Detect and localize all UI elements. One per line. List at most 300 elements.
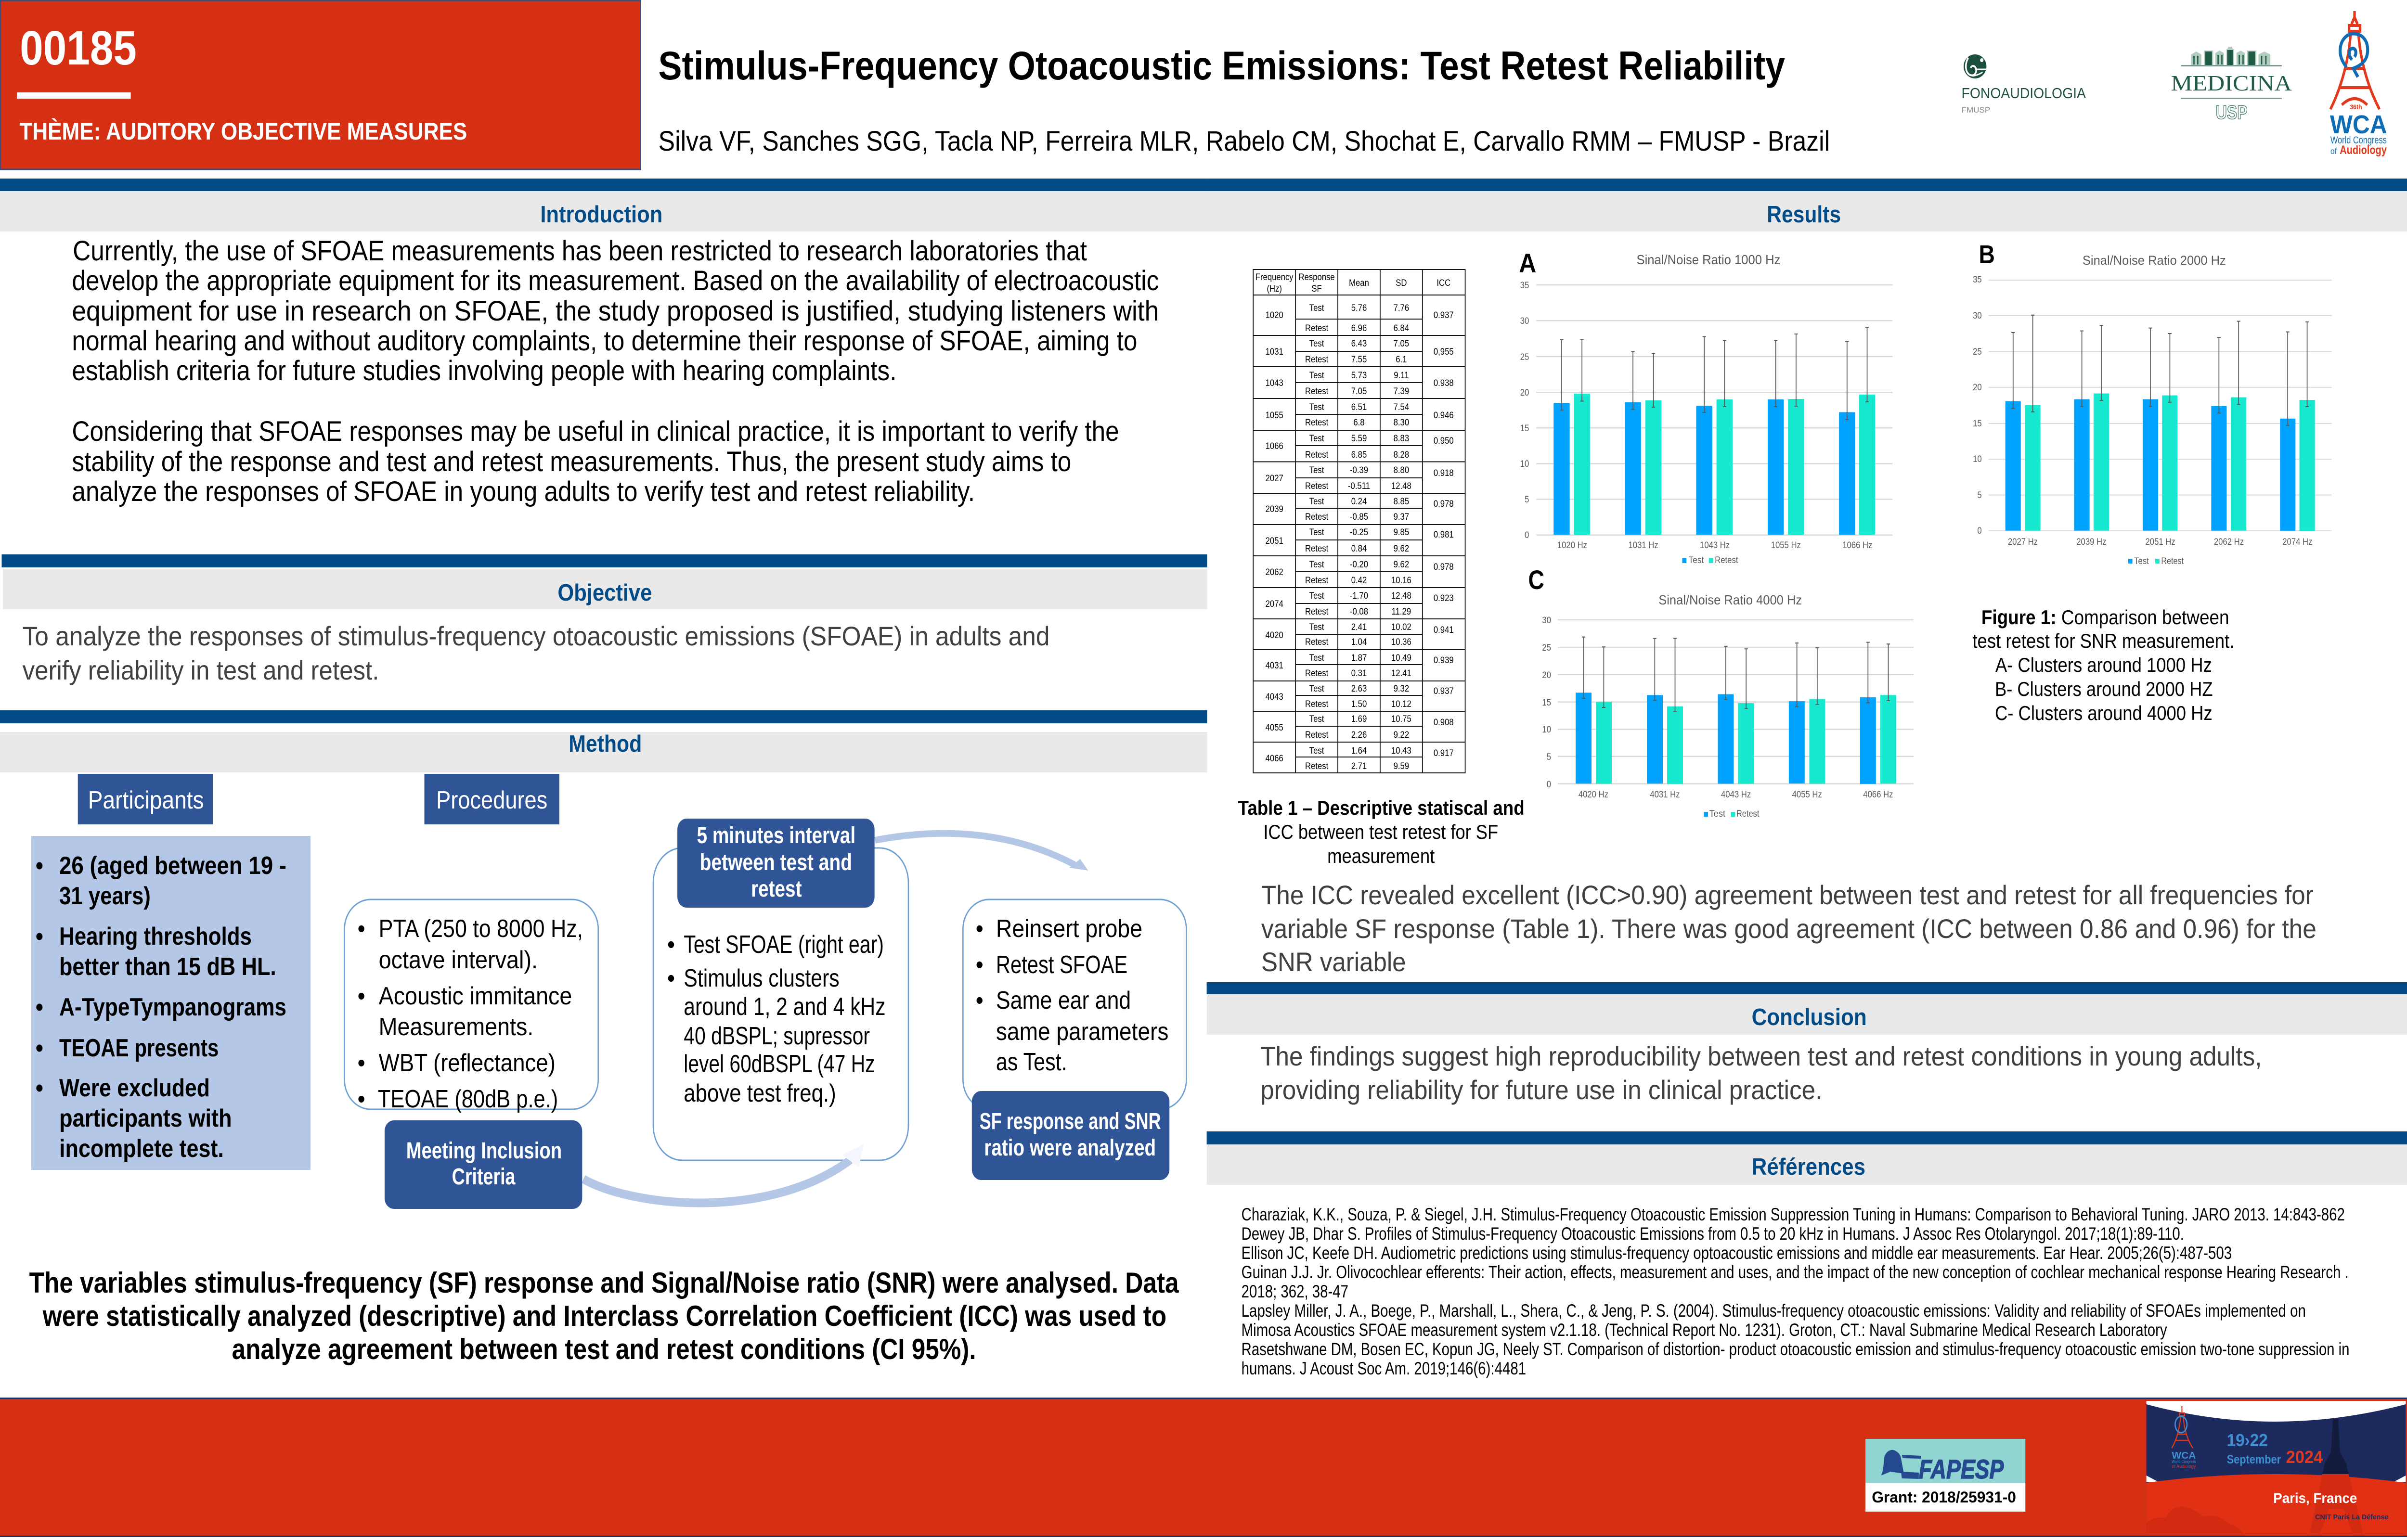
text block: ICC results: SNR variable xyxy=(1261,947,1406,977)
text block: reference list: 2018; 362, 38-47 xyxy=(1242,1282,1348,1301)
table: descriptive statistics and ICC: Test xyxy=(1309,303,1324,313)
chart B: Sinal/Noise Ratio 2000 Hz: Test xyxy=(2134,556,2149,566)
table: descriptive statistics and ICC: 7.54 xyxy=(1394,402,1409,412)
table: descriptive statistics and ICC: 8.83 xyxy=(1394,433,1409,443)
table: descriptive statistics and ICC: Retest xyxy=(1305,699,1328,709)
callout: SF response and SNR xyxy=(972,1091,1169,1180)
table: descriptive statistics and ICC: 6.8 xyxy=(1353,417,1365,427)
chart C: Sinal/Noise Ratio 4000 Hz: 0 xyxy=(1547,779,1551,789)
table: descriptive statistics and ICC: 1020 xyxy=(1266,310,1283,320)
panel: retest list: Retest SFOAE xyxy=(996,951,1127,979)
figure caption: C- Clusters around 4000 Hz xyxy=(1995,702,2213,725)
table: descriptive statistics and ICC: Retest xyxy=(1305,637,1328,647)
chart C: Sinal/Noise Ratio 4000 Hz: 10 xyxy=(1542,724,1551,734)
table: descriptive statistics and ICC: 1.50 xyxy=(1351,699,1367,709)
table: descriptive statistics and ICC: Test xyxy=(1309,433,1324,443)
table: descriptive statistics and ICC: -0.08 xyxy=(1350,606,1368,616)
table: descriptive statistics and ICC: 6.51 xyxy=(1351,402,1367,412)
table: descriptive statistics and ICC: 0.937 xyxy=(1434,686,1454,696)
table: descriptive statistics and ICC: 2027 xyxy=(1266,473,1283,483)
table: descriptive statistics and ICC: 10.75 xyxy=(1391,714,1411,724)
text block: introduction paragraphs xyxy=(72,235,1159,507)
table: descriptive statistics and ICC: Test xyxy=(1309,338,1324,348)
panel: retest list: • xyxy=(976,951,984,979)
theme label: THÈME: AUDITORY OBJECTIVE MEASURES xyxy=(19,117,467,145)
table: descriptive statistics and ICC: 9.62 xyxy=(1394,543,1409,553)
table: descriptive statistics and ICC: 1.87 xyxy=(1351,653,1367,663)
table caption: Table 1 – Descriptive statiscal and xyxy=(1238,797,1525,820)
table caption: measurement xyxy=(1327,845,1435,868)
table: descriptive statistics and ICC: 2.63 xyxy=(1351,683,1367,693)
chart C: Sinal/Noise Ratio 4000 Hz: 20 xyxy=(1542,670,1551,680)
table: descriptive statistics and ICC: 10.12 xyxy=(1391,699,1411,709)
table: descriptive statistics and ICC: 0.42 xyxy=(1351,575,1367,585)
chart C: Sinal/Noise Ratio 4000 Hz: Sinal/Noise Ratio 4000 Hz xyxy=(1658,592,1802,607)
text block: introduction paragraphs: equipment for use in research on SFOAE, the study proposed is justified, studying listeners with xyxy=(72,295,1159,327)
panel: SFOAE test list: above test freq.) xyxy=(684,1079,836,1107)
chart A: Sinal/Noise Ratio 1000 Hz: Sinal/Noise Ratio 1000 Hz xyxy=(1637,252,1780,267)
table: descriptive statistics and ICC: 0.24 xyxy=(1351,496,1367,506)
chart B: Sinal/Noise Ratio 2000 Hz: 2051 Hz xyxy=(2146,537,2175,547)
panel: participants criteria: incomplete test. xyxy=(59,1135,224,1163)
logo: WCA World Congress of Audiology: World Congress xyxy=(2330,135,2387,146)
table: descriptive statistics and ICC: 2051 xyxy=(1266,536,1283,546)
chart A: Sinal/Noise Ratio 1000 Hz: 1066 Hz xyxy=(1842,540,1872,550)
chart B: Sinal/Noise Ratio 2000 Hz: 2062 Hz xyxy=(2214,537,2244,547)
chart A: Sinal/Noise Ratio 1000 Hz: A xyxy=(1519,248,1536,279)
table: descriptive statistics and ICC: 6.1 xyxy=(1396,354,1407,364)
text block: reference list: Ellison JC, Keefe DH. Audiometric predictions using stimulus-frequency optoacoustic emissions and middle ear measurements. Ear Hear. 2005;26(5):487-503 xyxy=(1242,1243,2232,1263)
chart C: Sinal/Noise Ratio 4000 Hz: 4020 Hz xyxy=(1579,789,1608,799)
table: descriptive statistics and ICC: 7.55 xyxy=(1351,354,1367,364)
heading: Results: Results xyxy=(1767,201,1841,228)
text block: reference list: humans. J Acoust Soc Am. 2019;146(6):4481 xyxy=(1242,1359,1526,1378)
table caption: ICC between test retest for SF xyxy=(1263,821,1498,844)
table: descriptive statistics and ICC: 0.950 xyxy=(1434,436,1454,446)
chart B: Sinal/Noise Ratio 2000 Hz: Retest xyxy=(2161,556,2184,566)
heading: Objective: Objective xyxy=(557,579,652,606)
table: descriptive statistics and ICC: Test xyxy=(1309,590,1324,601)
panel: procedures list: PTA (250 to 8000 Hz, xyxy=(379,915,583,943)
table: descriptive statistics and ICC: SD xyxy=(1396,278,1407,288)
table: descriptive statistics and ICC: 5.76 xyxy=(1351,303,1367,313)
table: descriptive statistics and ICC: 11.29 xyxy=(1392,606,1411,616)
chart C: Sinal/Noise Ratio 4000 Hz: C xyxy=(1528,565,1544,595)
table: descriptive statistics and ICC: 0.939 xyxy=(1434,655,1454,665)
table: descriptive statistics and ICC: 0.946 xyxy=(1434,410,1454,420)
panel: participants criteria: • xyxy=(36,993,43,1021)
chart A: Sinal/Noise Ratio 1000 Hz: 1043 Hz xyxy=(1700,540,1730,550)
table: descriptive statistics and ICC: -0.39 xyxy=(1350,465,1368,475)
logo: Fonoaudiologia FMUSP: FONOAUDIOLOGIA xyxy=(1962,85,2086,102)
chart C: Sinal/Noise Ratio 4000 Hz: 4043 Hz xyxy=(1721,789,1751,799)
table: descriptive statistics and ICC: Mean xyxy=(1349,278,1369,288)
table: descriptive statistics and ICC: 1.04 xyxy=(1351,637,1367,647)
panel: SFOAE test list: • xyxy=(667,964,675,992)
table: descriptive statistics and ICC: 1.69 xyxy=(1351,714,1367,724)
table: descriptive statistics and ICC: 6.43 xyxy=(1351,338,1367,348)
table: descriptive statistics and ICC: 7.05 xyxy=(1351,386,1367,396)
panel: references xyxy=(1207,1131,2407,1378)
text block: conclusion: The findings suggest high reproducibility between test and retest conditions in young adults, xyxy=(1260,1041,2262,1072)
table: descriptive statistics and ICC: 8.80 xyxy=(1394,465,1409,475)
text block: introduction paragraphs: normal hearing and without auditory complaints, to determine their response of SFOAE, aiming to xyxy=(72,325,1137,357)
callout: meeting inclusion criteria: Criteria xyxy=(452,1163,516,1190)
table: descriptive statistics and ICC: 1066 xyxy=(1266,441,1283,451)
table: descriptive statistics and ICC: 0.938 xyxy=(1434,378,1454,388)
logo: FAPESP grant: FAPESP xyxy=(1919,1454,2004,1485)
panel: participants criteria: • xyxy=(36,923,43,950)
logo: Medicina USP: USP xyxy=(2216,102,2248,123)
panel: participants criteria: better than 15 dB HL. xyxy=(59,953,276,981)
table: descriptive statistics and ICC: Retest xyxy=(1305,668,1328,678)
text block: objective: To analyze the responses of stimulus-frequency otoacoustic emissions (SFOAE) in adults and xyxy=(23,621,1050,652)
text block: objective: verify reliability in test and retest. xyxy=(23,655,379,686)
table: descriptive statistics and ICC: Retest xyxy=(1305,386,1328,396)
chart C: Sinal/Noise Ratio 4000 Hz: Retest xyxy=(1736,808,1759,819)
panel: procedures list: WBT (reflectance) xyxy=(379,1049,556,1077)
table: descriptive statistics and ICC: ICC xyxy=(1436,278,1450,288)
table: descriptive statistics and ICC: Test xyxy=(1309,622,1324,632)
table: descriptive statistics and ICC: -0.20 xyxy=(1350,559,1368,569)
text block: reference list: Lapsley Miller, J. A., Boege, P., Marshall, L., Shera, C., & Jeng, P. S. (2004). Stimulus-frequency otoacoustic emissions: Validity and reliability of SFOAEs implemented on xyxy=(1242,1301,2306,1321)
table: descriptive statistics and ICC: 12.48 xyxy=(1391,590,1411,601)
chart C: Sinal/Noise Ratio 4000 Hz: 25 xyxy=(1542,642,1551,653)
figure caption: B- Clusters around 2000 HZ xyxy=(1995,678,2213,701)
table: descriptive statistics and ICC: Test xyxy=(1309,402,1324,412)
table: descriptive statistics and ICC: 7.76 xyxy=(1394,303,1409,313)
table: descriptive statistics and ICC: Test xyxy=(1309,527,1324,537)
table: descriptive statistics and ICC: 1055 xyxy=(1266,410,1283,420)
logo: Medicina USP: MEDICINA xyxy=(2171,71,2292,96)
table: descriptive statistics and ICC: Retest xyxy=(1305,354,1328,364)
mini WCA tower logo: of Audiology xyxy=(2172,1464,2196,1469)
panel: procedures list: Acoustic immitance xyxy=(379,982,572,1010)
chart C: Sinal/Noise Ratio 4000 Hz: 4031 Hz xyxy=(1650,789,1680,799)
panel: participants criteria: Hearing thresholds xyxy=(59,923,252,950)
chart A: Sinal/Noise Ratio 1000 Hz: 15 xyxy=(1520,423,1529,433)
text block: ICC results: The ICC revealed excellent (ICC>0.90) agreement between test and retest for all frequencies for xyxy=(1261,880,2314,911)
figure caption: A- Clusters around 1000 Hz xyxy=(1995,654,2212,677)
table: descriptive statistics and ICC: 0.978 xyxy=(1434,499,1454,509)
table: descriptive statistics and ICC: Retest xyxy=(1305,417,1328,427)
panel: procedures list: • xyxy=(358,982,365,1010)
table: descriptive statistics and ICC: 9.22 xyxy=(1394,730,1409,740)
panel: SFOAE test list: Test SFOAE (right ear) xyxy=(684,931,884,959)
chart A: Sinal/Noise Ratio 1000 Hz: 25 xyxy=(1520,352,1529,362)
panel: procedures list: • xyxy=(358,1085,365,1113)
panel: SFOAE test list: • xyxy=(667,931,675,959)
table: descriptive statistics and ICC: Retest xyxy=(1305,481,1328,491)
text block: introduction paragraphs: Currently, the use of SFOAE measurements has been restricted to research laboratories that xyxy=(73,235,1087,267)
chart B: Sinal/Noise Ratio 2000 Hz: 5 xyxy=(1977,490,1982,500)
chart B: Sinal/Noise Ratio 2000 Hz: 30 xyxy=(1973,310,1982,321)
table: descriptive statistics and ICC: 10.36 xyxy=(1391,637,1411,647)
panel: participants criteria xyxy=(31,836,311,1170)
table: descriptive statistics and ICC: Test xyxy=(1309,559,1324,569)
label: Participants xyxy=(78,774,213,824)
callout: 5 minutes interval xyxy=(677,819,875,908)
table: descriptive statistics and ICC: 0.917 xyxy=(1434,748,1454,758)
table: descriptive statistics and ICC: 0.937 xyxy=(1434,310,1454,320)
chart C: Sinal/Noise Ratio 4000 Hz: 15 xyxy=(1542,697,1551,707)
table: descriptive statistics and ICC: Test xyxy=(1309,683,1324,693)
panel: SFOAE test list: Stimulus clusters xyxy=(684,964,840,992)
panel: participants criteria: Were excluded xyxy=(59,1074,210,1102)
panel: SFOAE test list: level 60dBSPL (47 Hz xyxy=(684,1050,875,1078)
callout: meeting inclusion criteria: Meeting Inclusion xyxy=(406,1137,562,1164)
chart C: Sinal/Noise Ratio 4000 Hz: 4066 Hz xyxy=(1863,789,1893,799)
text block: conclusion xyxy=(1260,1041,2262,1105)
text block: introduction paragraphs: Considering that SFOAE responses may be useful in clinical practice, it is important to verify the xyxy=(72,416,1119,447)
table: descriptive statistics and ICC: 10.02 xyxy=(1391,622,1411,632)
table: descriptive statistics and ICC: 7.05 xyxy=(1394,338,1409,348)
table: descriptive statistics and ICC: 0.941 xyxy=(1434,625,1454,635)
chart C: Sinal/Noise Ratio 4000 Hz: 4055 Hz xyxy=(1792,789,1822,799)
table: descriptive statistics and ICC: SF xyxy=(1311,283,1322,294)
panel: SFOAE test list: around 1, 2 and 4 kHz xyxy=(684,993,886,1021)
table: descriptive statistics and ICC: Retest xyxy=(1305,606,1328,616)
table: descriptive statistics and ICC: 1043 xyxy=(1266,378,1283,388)
table: descriptive statistics and ICC: 12.48 xyxy=(1391,481,1411,491)
chart B: Sinal/Noise Ratio 2000 Hz: B xyxy=(1979,240,1995,269)
mini WCA tower logo: WCA xyxy=(2172,1450,2196,1461)
table: descriptive statistics and ICC: 2.41 xyxy=(1351,622,1367,632)
mini WCA tower logo: World Congress xyxy=(2172,1460,2196,1464)
table: descriptive statistics and ICC: Retest xyxy=(1305,543,1328,553)
table: descriptive statistics and ICC: 5.73 xyxy=(1351,370,1367,380)
text block: ICC results xyxy=(1261,880,2316,977)
chart A: Sinal/Noise Ratio 1000 Hz: 0 xyxy=(1525,530,1529,540)
logo: FAPESP grant xyxy=(1865,1439,2025,1512)
arrow: inclusion to test xyxy=(583,1144,864,1203)
table: descriptive statistics and ICC: Retest xyxy=(1305,512,1328,522)
text block: analysis summary xyxy=(29,1267,1179,1365)
table: descriptive statistics and ICC: 0.981 xyxy=(1434,529,1454,539)
table: descriptive statistics and ICC: Frequency xyxy=(1255,272,1294,282)
text block: reference list: Dewey JB, Dhar S. Profiles of Stimulus-Frequency Otoacoustic Emissions from 0.5 to 20 kHz in Humans. J Assoc Res Otolaryngol. 2017;18(1):89-110. xyxy=(1242,1224,2184,1244)
panel: participants criteria: participants with xyxy=(59,1104,232,1132)
chart A: Sinal/Noise Ratio 1000 Hz: 30 xyxy=(1520,316,1529,326)
table: descriptive statistics and ICC: 9.37 xyxy=(1394,512,1409,522)
panel: participants criteria: • xyxy=(36,1074,43,1102)
panel: participants criteria: • xyxy=(36,1034,43,1062)
table: descriptive statistics and ICC: 0.31 xyxy=(1351,668,1367,678)
table: descriptive statistics and ICC: 8.30 xyxy=(1394,417,1409,427)
chart A: Sinal/Noise Ratio 1000 Hz: Retest xyxy=(1715,555,1738,565)
table: descriptive statistics and ICC: 4031 xyxy=(1266,660,1283,670)
table: descriptive statistics and ICC: 10.49 xyxy=(1391,653,1411,663)
table: descriptive statistics and ICC: 12.41 xyxy=(1391,668,1411,678)
table: descriptive statistics and ICC: Test xyxy=(1309,496,1324,506)
chart B: Sinal/Noise Ratio 2000 Hz: 2074 Hz xyxy=(2282,537,2313,547)
table: descriptive statistics and ICC: 10.16 xyxy=(1391,575,1411,585)
text block: reference list xyxy=(1242,1205,2349,1378)
table: descriptive statistics and ICC: Retest xyxy=(1305,761,1328,771)
table: descriptive statistics and ICC: 2039 xyxy=(1266,504,1283,514)
table: descriptive statistics and ICC: Response xyxy=(1299,272,1335,282)
table: descriptive statistics and ICC: Test xyxy=(1309,465,1324,475)
arrow: test to retest xyxy=(875,834,1088,871)
chart B: Sinal/Noise Ratio 2000 Hz xyxy=(1973,240,2332,566)
logo: Medicina USP xyxy=(2171,47,2292,123)
table caption xyxy=(1238,797,1525,868)
text block: analysis summary: analyze agreement between test and retest conditions (CI 95%). xyxy=(232,1333,976,1365)
chart A: Sinal/Noise Ratio 1000 Hz xyxy=(1519,248,1892,565)
table: descriptive statistics and ICC: Test xyxy=(1309,745,1324,756)
label: Procedures: Procedures xyxy=(436,786,547,814)
panel: introduction xyxy=(0,179,1207,507)
title: Stimulus-Frequency Otoacoustic Emissions: Test Retest Reliability xyxy=(659,43,1785,88)
chart C: Sinal/Noise Ratio 4000 Hz: Test xyxy=(1709,808,1725,819)
chart B: Sinal/Noise Ratio 2000 Hz: 15 xyxy=(1973,418,1982,428)
banner: congress dates and location: Paris, France xyxy=(2273,1489,2357,1506)
table: descriptive statistics and ICC: 7.39 xyxy=(1394,386,1409,396)
mini WCA tower logo xyxy=(2172,1406,2196,1469)
table: descriptive statistics and ICC: 0.918 xyxy=(1434,468,1454,478)
panel: objective xyxy=(2,554,1207,686)
figure caption xyxy=(1972,606,2234,725)
table: descriptive statistics and ICC: 0.978 xyxy=(1434,562,1454,572)
logo: Fonoaudiologia FMUSP xyxy=(1962,54,2086,115)
panel: retest list: • xyxy=(976,987,984,1014)
white accent bar xyxy=(17,92,131,99)
text block: introduction paragraphs: develop the appropriate equipment for its measurement. Based on the availability of electroacoustic xyxy=(72,265,1159,296)
banner: congress dates and location: 2024 xyxy=(2286,1448,2323,1467)
callout: 5 minutes interval: between test and xyxy=(700,849,852,875)
table: descriptive statistics and ICC: 9.59 xyxy=(1394,761,1409,771)
chart B: Sinal/Noise Ratio 2000 Hz: 35 xyxy=(1973,274,1982,284)
table: descriptive statistics and ICC: 4055 xyxy=(1266,722,1283,732)
figure caption: Figure 1: Comparison between xyxy=(1981,606,2229,629)
table: descriptive statistics and ICC: 1.64 xyxy=(1351,745,1367,756)
panel: retest list: • xyxy=(976,915,984,943)
poster number: 00185 xyxy=(20,21,137,75)
text block: objective xyxy=(23,621,1050,686)
logo: Fonoaudiologia FMUSP: FMUSP xyxy=(1962,106,1990,115)
table: descriptive statistics and ICC: 4020 xyxy=(1266,630,1283,640)
chart A: Sinal/Noise Ratio 1000 Hz: 35 xyxy=(1520,280,1529,290)
heading: Références: Références xyxy=(1752,1153,1865,1180)
table: descriptive statistics and ICC: Test xyxy=(1309,653,1324,663)
label: Participants: Participants xyxy=(88,786,204,814)
table: descriptive statistics and ICC: Retest xyxy=(1305,323,1328,333)
table: descriptive statistics and ICC: Test xyxy=(1309,370,1324,380)
panel: retest list xyxy=(963,899,1186,1109)
table: descriptive statistics and ICC: -0.85 xyxy=(1350,512,1368,522)
heading: Method: Method xyxy=(569,730,642,757)
table: descriptive statistics and ICC: Test xyxy=(1309,714,1324,724)
text block: analysis summary: The variables stimulus-frequency (SF) response and Signal/Noise ratio (SNR) were analysed. Data xyxy=(29,1267,1179,1299)
panel: procedures list: • xyxy=(358,1049,365,1077)
panel: retest list: as Test. xyxy=(996,1048,1067,1076)
panel: procedures list xyxy=(344,899,598,1113)
table: descriptive statistics and ICC: -0.25 xyxy=(1350,527,1368,537)
panel: participants criteria: A-TypeTympanograms xyxy=(59,993,286,1021)
figure caption: test retest for SNR measurement. xyxy=(1972,630,2234,653)
chart A: Sinal/Noise Ratio 1000 Hz: Test xyxy=(1689,555,1704,565)
chart A: Sinal/Noise Ratio 1000 Hz: 1020 Hz xyxy=(1557,540,1587,550)
table: descriptive statistics and ICC: 4066 xyxy=(1266,753,1283,763)
table: descriptive statistics and ICC: 9.32 xyxy=(1394,683,1409,693)
panel: participants criteria: • xyxy=(36,852,43,880)
panel: results xyxy=(1207,179,2407,977)
panel: retest list: same parameters xyxy=(996,1018,1168,1046)
logo: WCA World Congress of Audiology: Audiology xyxy=(2340,143,2387,156)
heading: Introduction: Introduction xyxy=(540,201,662,228)
table: descriptive statistics and ICC: 0,955 xyxy=(1434,346,1454,357)
text block: introduction paragraphs: stability of the response and test and retest measurements. Thus, the present study aims to xyxy=(72,446,1071,477)
table: descriptive statistics and ICC: 0.923 xyxy=(1434,593,1454,603)
panel: retest list: Same ear and xyxy=(996,987,1131,1014)
table: descriptive statistics and ICC: 4043 xyxy=(1266,692,1283,702)
callout: meeting inclusion criteria xyxy=(385,1120,582,1209)
chart B: Sinal/Noise Ratio 2000 Hz: 20 xyxy=(1973,382,1982,392)
table: descriptive statistics and ICC xyxy=(1253,270,1465,773)
panel: participants criteria: 26 (aged between 19 - xyxy=(59,852,286,880)
panel: participants criteria: TEOAE presents xyxy=(59,1034,219,1062)
chart B: Sinal/Noise Ratio 2000 Hz: Sinal/Noise Ratio 2000 Hz xyxy=(2083,254,2226,268)
text block: ICC results: variable SF response (Table 1). There was good agreement (ICC between 0.86 and 0.96) for the xyxy=(1261,914,2316,944)
logo: WCA World Congress of Audiology: of xyxy=(2330,146,2337,156)
table: descriptive statistics and ICC: 2.26 xyxy=(1351,730,1367,740)
chart A: Sinal/Noise Ratio 1000 Hz: 5 xyxy=(1525,494,1529,504)
text block: analysis summary: were statistically analyzed (descriptive) and Interclass Correlation Coefficient (ICC) was used to xyxy=(42,1300,1166,1332)
chart C: Sinal/Noise Ratio 4000 Hz: 30 xyxy=(1542,615,1551,625)
chart A: Sinal/Noise Ratio 1000 Hz: 1031 Hz xyxy=(1629,540,1658,550)
table: descriptive statistics and ICC: -0.511 xyxy=(1348,481,1370,491)
header: red theme panel xyxy=(0,0,641,169)
panel: method xyxy=(0,710,1207,1365)
text block: reference list: Mimosa Acoustics SFOAE measurement system v2.1.18. (Technical Report No. 1231). Groton, CT.: Naval Submarine Medical Research Laboratory xyxy=(1242,1320,2167,1340)
table: descriptive statistics and ICC: (Hz) xyxy=(1267,283,1282,294)
banner: congress dates and location: CNIT Paris La Défense xyxy=(2315,1513,2388,1521)
heading: Conclusion: Conclusion xyxy=(1752,1003,1867,1030)
text block: conclusion: providing reliability for future use in clinical practice. xyxy=(1260,1075,1822,1105)
callout: 5 minutes interval: retest xyxy=(751,875,802,902)
panel: procedures list: Measurements. xyxy=(379,1013,533,1041)
banner: congress dates and location: 19›22 xyxy=(2227,1431,2268,1450)
logo: WCA World Congress of Audiology: WCA xyxy=(2330,110,2387,139)
table: descriptive statistics and ICC: 0.84 xyxy=(1351,543,1367,553)
callout: SF response and SNR: SF response and SNR xyxy=(980,1108,1161,1134)
text block: introduction paragraphs: analyze the responses of SFOAE in young adults to verify test and retest reliability. xyxy=(72,476,975,507)
table: descriptive statistics and ICC: 9.85 xyxy=(1394,527,1409,537)
panel: retest list: Reinsert probe xyxy=(996,915,1142,943)
panel: procedures list: TEOAE (80dB p.e.) xyxy=(378,1085,558,1113)
table: descriptive statistics and ICC: 6.85 xyxy=(1351,449,1367,460)
table: descriptive statistics and ICC: 2062 xyxy=(1266,567,1283,577)
banner: congress dates and location: September xyxy=(2227,1453,2281,1466)
panel: procedures list: octave interval). xyxy=(379,946,538,974)
banner: congress dates and location xyxy=(2147,1401,2406,1533)
chart B: Sinal/Noise Ratio 2000 Hz: 10 xyxy=(1973,454,1982,464)
logo: WCA World Congress of Audiology: 36th xyxy=(2350,103,2362,111)
logo: WCA World Congress of Audiology xyxy=(2330,11,2387,156)
table: descriptive statistics and ICC: 8.85 xyxy=(1394,496,1409,506)
chart A: Sinal/Noise Ratio 1000 Hz: 10 xyxy=(1520,459,1529,469)
table: descriptive statistics and ICC: 2074 xyxy=(1266,599,1283,609)
table: descriptive statistics and ICC: 6.96 xyxy=(1351,323,1367,333)
panel: SFOAE test list: 40 dBSPL; supressor xyxy=(684,1022,870,1050)
chart C: Sinal/Noise Ratio 4000 Hz: 5 xyxy=(1547,752,1551,762)
table: descriptive statistics and ICC: 9.11 xyxy=(1394,370,1409,380)
table: descriptive statistics and ICC: -1.70 xyxy=(1350,590,1368,601)
table: descriptive statistics and ICC: 2.71 xyxy=(1351,761,1367,771)
table: descriptive statistics and ICC: Retest xyxy=(1305,449,1328,460)
callout: 5 minutes interval: 5 minutes interval xyxy=(697,822,855,848)
table: descriptive statistics and ICC: 10.43 xyxy=(1391,745,1411,756)
